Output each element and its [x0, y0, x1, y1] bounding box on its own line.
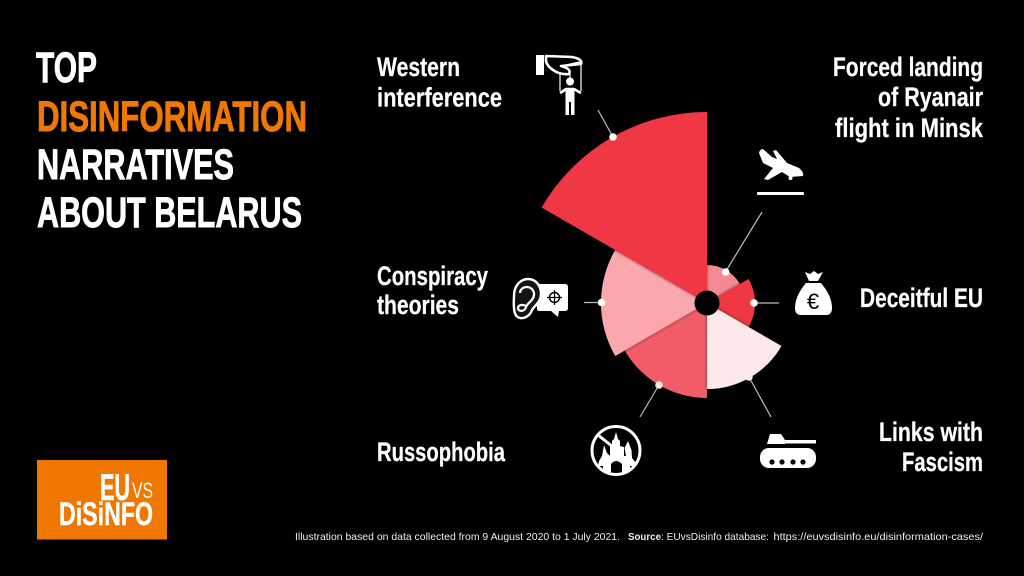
logo: EUvsDisinfo: DiSiNFO [59, 496, 153, 532]
label: Deceitful EU: Deceitful EU [860, 283, 983, 313]
label: Western interference: Western [377, 52, 460, 82]
connector: Conspiracy theories [584, 299, 605, 306]
label: Forced landing of Ryanair flight in Minsk: flight in Minsk [835, 113, 983, 143]
icon: ear and target speech bubble [514, 279, 568, 318]
label: Forced landing of Ryanair flight in Minsk: of Ryanair [878, 82, 983, 112]
title: DISINFORMATION [37, 93, 307, 141]
connector: Russophobia [640, 381, 663, 417]
segment: Forced landing of Ryanair flight [707, 265, 740, 303]
title [36, 44, 307, 237]
connector: Deceitful EU [750, 299, 779, 307]
label: Conspiracy theories: Conspiracy [377, 261, 488, 291]
source note: Source [628, 531, 661, 543]
segment: Conspiracy theories [601, 250, 707, 356]
polar area chart [542, 112, 782, 398]
connector: Western interference [598, 110, 617, 141]
label: Links with Fascism: Links with [879, 417, 983, 447]
connector: Links with Fascism [745, 373, 771, 417]
source note: https://euvsdisinfo.eu/disinformation-cases/ [774, 531, 983, 543]
label: Conspiracy theories: theories [377, 290, 459, 320]
segment: Deceitful EU [707, 279, 755, 327]
title: ABOUT BELARUS [37, 189, 302, 237]
label: Forced landing of Ryanair flight in Minsk: Forced landing [833, 52, 983, 82]
logo: EUvsDisinfo: EU [100, 467, 130, 508]
icon: crossed-out Kremlin [592, 426, 640, 474]
icon: tank [760, 434, 816, 468]
icon: money bag with euro [795, 271, 832, 315]
icon: landing plane [757, 149, 804, 195]
label: Conspiracy theories [377, 261, 488, 320]
label: Western interference [377, 52, 502, 112]
chart hub [694, 290, 720, 316]
title: NARRATIVES [37, 141, 234, 189]
label: Western interference: interference [377, 82, 502, 112]
label: Links with Fascism: Fascism [902, 447, 983, 477]
segment: Western interference [542, 112, 707, 303]
label: Links with Fascism [879, 417, 983, 477]
title: TOP [36, 44, 97, 92]
label: Forced landing of Ryanair flight in Minsk [833, 52, 983, 143]
logo: EUvsDisinfo: VS [132, 478, 153, 503]
icon: money bag with euro: € [807, 289, 819, 314]
label: Russophobia: Russophobia [377, 437, 505, 467]
segment: Links with Fascism [707, 303, 782, 389]
icon: puppet on strings [536, 55, 581, 115]
logo: EUvsDisinfo [37, 460, 167, 540]
segment: Russophobia [625, 303, 707, 398]
source note: Illustration based on data collected from 9 August 2020 to 1 July 2021. [295, 531, 620, 543]
connector: Forced landing [722, 212, 762, 276]
source note [295, 531, 983, 543]
source note: : EUvsDisinfo database: [661, 531, 769, 543]
